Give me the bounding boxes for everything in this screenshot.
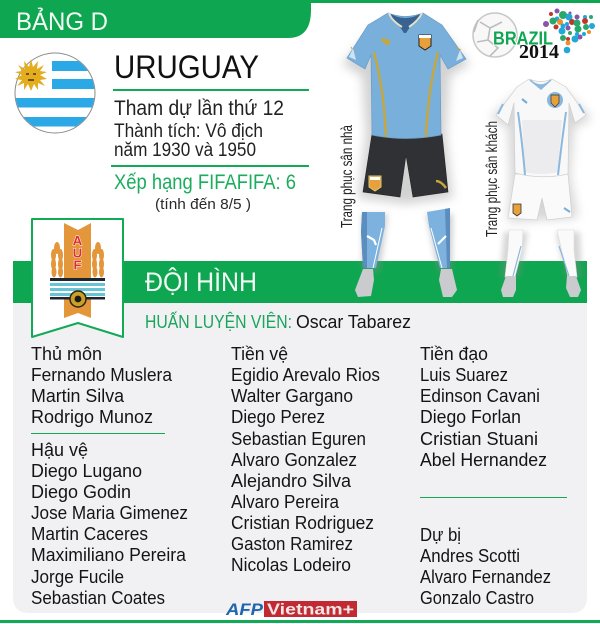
column 2: midfielders <box>231 344 380 575</box>
achievements text: Thành tích: Vô địch <box>114 121 263 142</box>
logo year: 2014 <box>519 41 559 63</box>
column 1: goalkeepers and defenders: Hậu vệ <box>31 440 88 460</box>
column 2: midfielders: Nicolas Lodeiro <box>231 555 351 575</box>
column 2: midfielders: Alvaro Pereira <box>231 492 340 512</box>
away shorts crest <box>513 204 521 216</box>
column 3: forwards and reserves: Dự bị <box>420 525 461 545</box>
home shirt <box>347 13 466 138</box>
badge letters: A <box>73 233 83 248</box>
icon: AUF badge <box>32 219 123 337</box>
away kit <box>490 79 592 297</box>
home side stripes <box>374 52 438 137</box>
achievements text <box>114 121 263 161</box>
wheat right <box>92 242 104 278</box>
away shirt <box>496 79 586 177</box>
column 1: goalkeepers and defenders: Fernando Muslera <box>31 365 173 385</box>
squad heading bar <box>13 261 587 303</box>
wheat left <box>51 242 63 278</box>
away shorts <box>508 174 572 220</box>
coach line: HUẤN LUYỆN VIÊN: <box>145 311 292 332</box>
column 1: goalkeepers and defenders: Thủ môn <box>31 344 102 364</box>
participation text: Tham dự lần thứ 12 <box>114 97 284 120</box>
column 3: forwards and reserves: Abel Hernandez <box>420 450 547 470</box>
column 1: goalkeepers and defenders: Rodrigo Munoz <box>31 407 153 427</box>
bottom green rule <box>0 620 600 623</box>
column 1: goalkeepers and defenders: Sebastian Coates <box>31 588 165 608</box>
column 2: midfielders: Alejandro Silva <box>231 471 352 491</box>
home crest <box>419 35 431 50</box>
column 1: goalkeepers and defenders: Diego Godin <box>31 482 131 502</box>
column 2: midfielders: Cristian Rodriguez <box>231 513 374 533</box>
badge ball <box>70 291 86 307</box>
column 2: midfielders: Tiền vệ <box>231 344 288 364</box>
column 1: goalkeepers and defenders: Martin Caceres <box>31 524 148 544</box>
column 1: goalkeepers and defenders: Maximiliano Pereira <box>31 545 187 565</box>
column 2: midfielders: Gaston Ramirez <box>231 534 353 554</box>
away sun crest <box>547 92 563 108</box>
Brazil 2014 logo <box>473 8 595 63</box>
column 3: forwards and reserves: Tiền đạo <box>420 344 488 364</box>
column 2: midfielders: Alvaro Gonzalez <box>231 450 357 470</box>
column 3: forwards and reserves: Diego Forlan <box>420 407 521 427</box>
badge letters: U <box>73 246 82 260</box>
column 3: forwards and reserves: Edinson Cavani <box>420 386 540 406</box>
column 3: forwards and reserves: Gonzalo Castro <box>420 588 534 608</box>
coach line: Oscar Tabarez <box>296 312 411 332</box>
header bar: group name <box>0 0 600 38</box>
column 1: goalkeepers and defenders <box>31 344 188 608</box>
home shorts <box>363 134 448 197</box>
logo wordmark: BRAZIL <box>493 28 553 48</box>
home kit label: Trang phục sân nhà <box>339 125 356 228</box>
source logo: AFP Vietnam+ <box>225 600 357 619</box>
home feet <box>355 269 457 297</box>
badge letters <box>73 233 83 272</box>
source logo: AFP Vietnam+: AFP <box>225 600 264 619</box>
column 3: forwards and reserves <box>420 344 567 608</box>
column 1: goalkeepers and defenders: Jose Maria Gimenez <box>31 503 188 523</box>
home socks <box>361 212 385 268</box>
logo football <box>473 13 517 57</box>
logo dots <box>543 8 595 53</box>
shorts crest <box>369 176 381 191</box>
away feet <box>501 276 581 297</box>
FIFA ranking: Xếp hạng FIFAFIFA: 6 <box>114 171 296 194</box>
column 2: midfielders: Diego Perez <box>231 407 325 427</box>
badge letters: F <box>74 258 82 272</box>
column 3: forwards and reserves: Luis Suarez <box>420 365 508 385</box>
source logo: AFP Vietnam+: Vietnam+ <box>267 602 354 618</box>
country name: URUGUAY <box>114 49 259 85</box>
achievements text: năm 1930 và 1950 <box>114 140 256 161</box>
away socks <box>505 230 577 277</box>
panel: squad background <box>13 300 587 613</box>
ranking date note: (tính đến 8/5 ) <box>155 196 251 213</box>
coach line <box>145 311 411 332</box>
column 3: forwards and reserves: Andres Scotti <box>420 546 520 566</box>
column 1: goalkeepers and defenders: Martin Silva <box>31 386 125 406</box>
column 1: goalkeepers and defenders: Jorge Fucile <box>31 567 124 587</box>
column 2: midfielders: Walter Gargano <box>231 386 353 406</box>
column 3: forwards and reserves: Cristian Stuani <box>420 429 538 449</box>
column 2: midfielders: Sebastian Eguren <box>231 429 366 449</box>
squad heading: ĐỘI HÌNH <box>145 266 257 297</box>
icon: Uruguay flag <box>14 52 96 134</box>
column 2: midfielders: Egidio Arevalo Rios <box>231 365 380 385</box>
home kit <box>342 13 470 297</box>
column 3: forwards and reserves: Alvaro Fernandez <box>420 567 551 587</box>
group title: BẢNG D <box>16 6 108 36</box>
icon: sun of May <box>15 59 47 91</box>
away kit label: Trang phục sân khách <box>484 121 501 237</box>
column 1: goalkeepers and defenders: Diego Lugano <box>31 461 142 481</box>
